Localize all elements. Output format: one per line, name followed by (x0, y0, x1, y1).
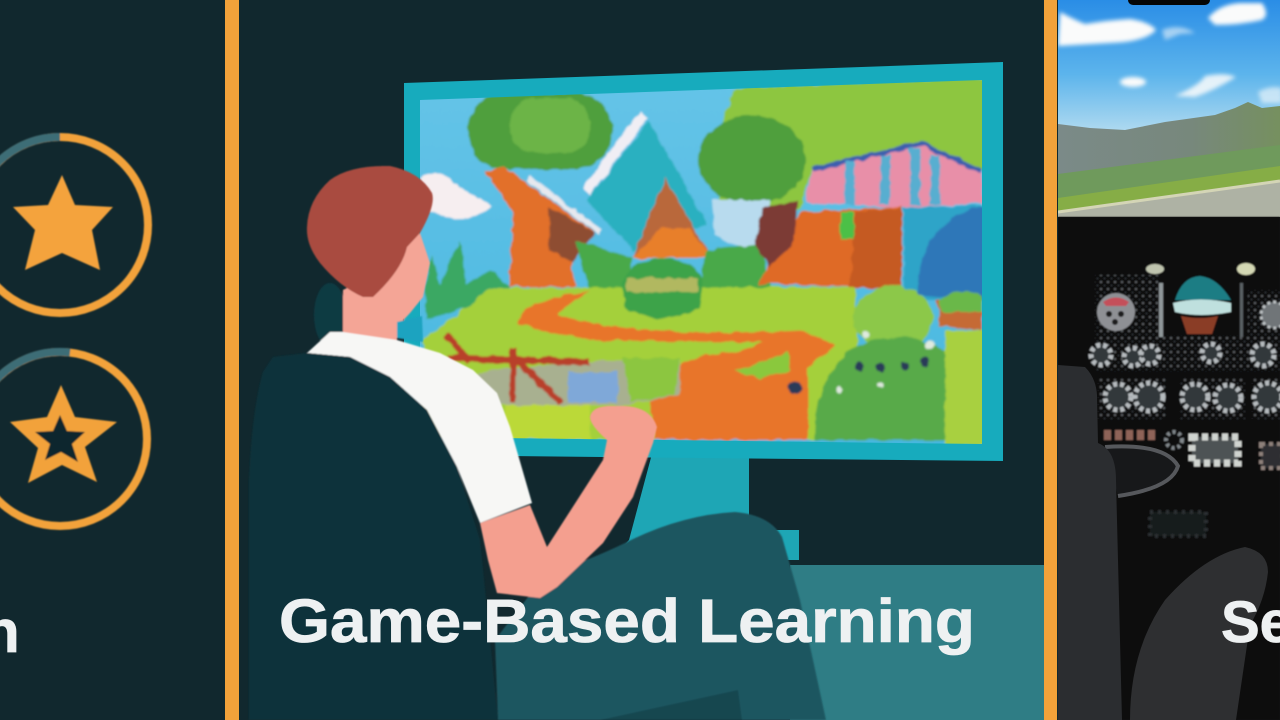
lower right cluster (1261, 444, 1280, 468)
arm (480, 406, 657, 598)
blue barn (903, 205, 982, 300)
scene dots (788, 357, 930, 395)
lower display (1192, 437, 1238, 463)
right bushes (853, 286, 933, 350)
meadow (420, 287, 860, 440)
orange middle mound (633, 177, 711, 258)
central bush (622, 258, 703, 318)
chair headrest (314, 283, 346, 347)
clouds (1058, 3, 1280, 103)
cloud (420, 172, 491, 219)
small island (733, 352, 790, 378)
vertical strips (1159, 283, 1163, 337)
tree middle (698, 116, 806, 204)
dotted panel texture (1095, 275, 1280, 420)
collar (397, 316, 423, 342)
gauge clusters (1091, 344, 1280, 411)
heading: game-based learning: Game-Based Learning (279, 587, 975, 655)
divider: right orange (1044, 0, 1057, 720)
panel: game-based learning (249, 62, 1044, 720)
windshield: sky (1058, 0, 1280, 135)
field (1058, 166, 1280, 212)
barn roof (805, 143, 982, 208)
legs (495, 512, 826, 720)
orange left mound (484, 167, 595, 287)
monitor (400, 62, 1003, 560)
top status lights (1146, 264, 1164, 274)
panel: simulation (1057, 0, 1280, 720)
lower faint controls (1150, 512, 1206, 536)
green slope (1058, 145, 1280, 200)
seat (1058, 365, 1122, 720)
tree left (468, 93, 612, 169)
icon: filled star badge (0, 137, 148, 313)
yoke (1105, 446, 1178, 496)
barn side dark (755, 200, 797, 268)
hair (307, 166, 433, 297)
pilot leg (1130, 547, 1268, 720)
panel: left achievements (0, 137, 148, 665)
central display (1173, 276, 1231, 334)
centre shrubs (575, 240, 770, 292)
warning row (1104, 430, 1158, 440)
fence (447, 335, 590, 402)
attitude gauge (1097, 293, 1135, 331)
person (249, 166, 826, 720)
barn walls (758, 207, 902, 288)
divider: left orange (225, 0, 239, 720)
fence area (478, 358, 680, 405)
icon: outlined star badge (0, 352, 147, 526)
monitor frame (404, 62, 1003, 461)
neck and face (343, 233, 430, 342)
shirt (307, 332, 532, 523)
device notch (1128, 0, 1210, 5)
lime patch (505, 403, 590, 440)
top right hill (720, 78, 985, 210)
tent (587, 120, 707, 250)
tent stripe (586, 114, 644, 192)
chair (249, 353, 498, 720)
right partial gauge (1261, 302, 1280, 328)
instrument panel (1058, 216, 1280, 539)
screen: game scene (420, 80, 982, 444)
orange path (518, 291, 836, 440)
runway (1058, 181, 1280, 217)
mist (712, 200, 775, 250)
left small plants (425, 240, 510, 320)
hills (1058, 102, 1280, 174)
desk (790, 565, 1044, 720)
monitor stand (610, 450, 799, 560)
